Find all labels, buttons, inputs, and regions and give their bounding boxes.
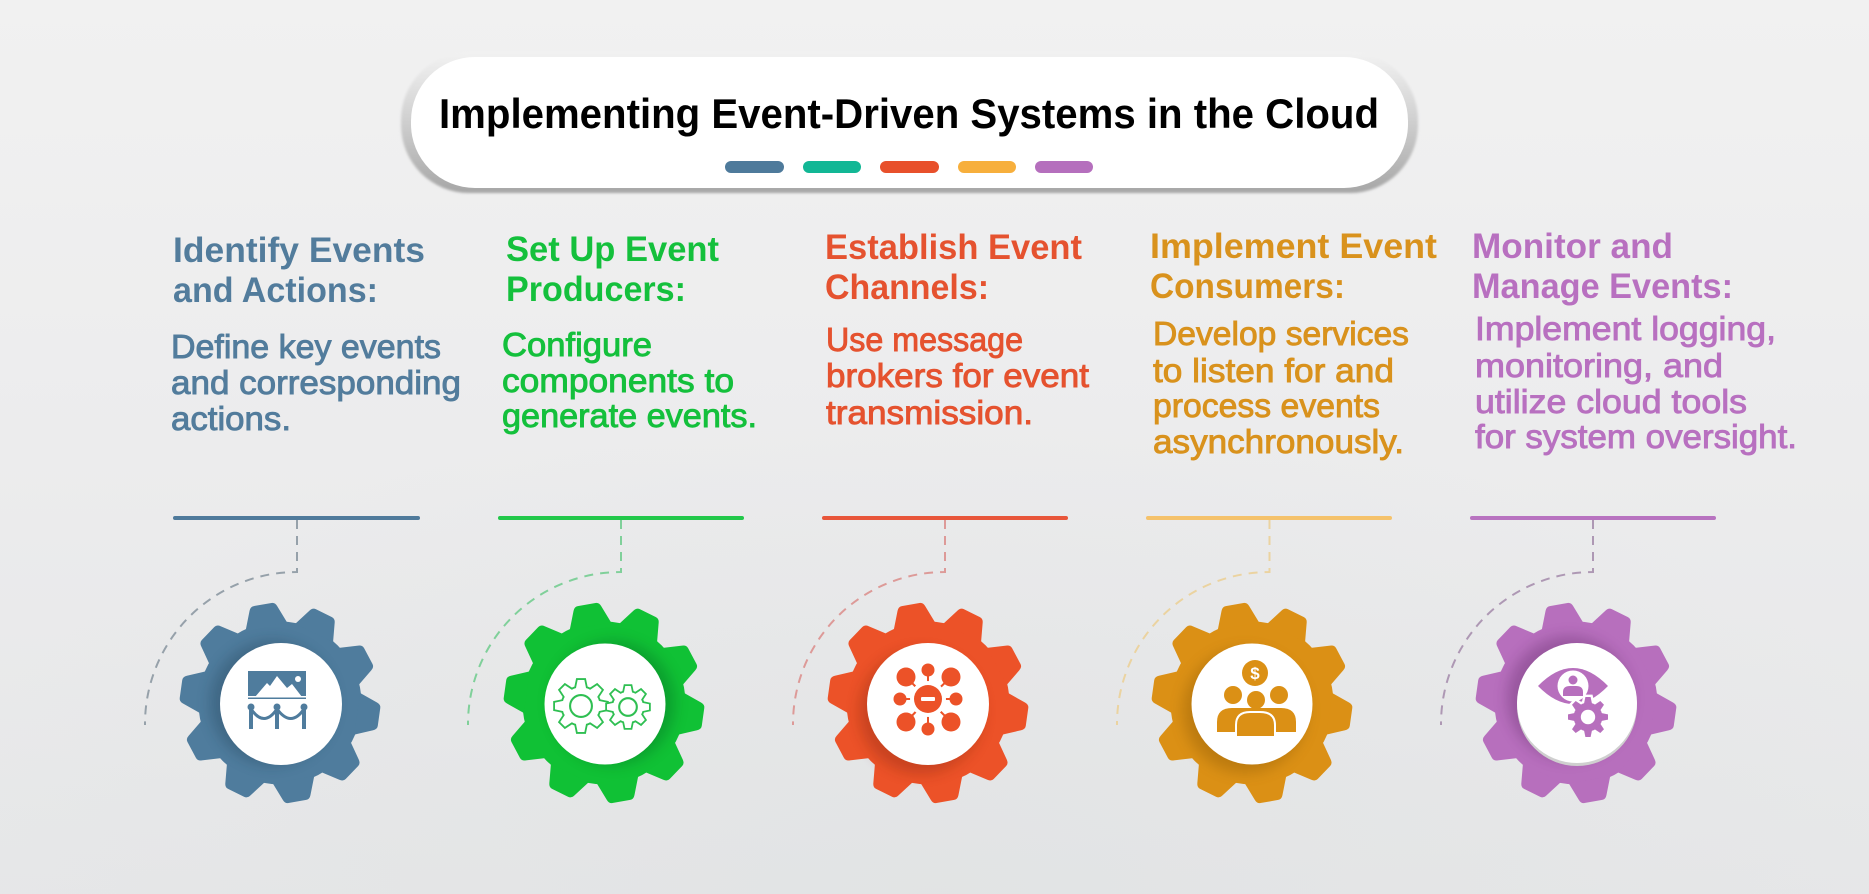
description: step 4 [1153,315,1409,460]
gear: step 2 [502,601,706,805]
description: step 5: monitoring, and [1475,347,1723,384]
description: step 3: transmission. [826,394,1033,431]
heading: monitor and manage events: Monitor and [1472,227,1673,266]
icon: two outlined gears [555,680,649,732]
description: step 1 [171,328,461,437]
panel: step 4 implement event consumers [1117,227,1437,805]
connector: step 3 [793,520,945,725]
description: step 1: Define key events [171,328,441,365]
description: step 2: components to [502,362,734,399]
connector: step 5 [1441,520,1593,725]
description: step 5 [1475,310,1797,455]
description: step 3: brokers for event [826,357,1089,394]
heading: establish event channels [825,228,1082,307]
heading: set up event producers [506,230,719,309]
panel: step 1 identify events and actions [145,231,461,805]
connector: step 2 [468,520,621,725]
description: step 5: utilize cloud tools [1475,383,1747,420]
gear: step 5 [1474,601,1678,805]
colour legend bars [725,161,1093,173]
description: step 2: generate events. [502,397,757,434]
title pill [401,52,1418,193]
heading: implement event consumers: Implement Event [1150,227,1437,266]
rule: step 2 [498,516,744,520]
description: step 4: to listen for and [1153,352,1394,389]
heading: implement event consumers [1150,227,1437,306]
rule: step 3 [822,516,1068,520]
title: Implementing Event-Driven Systems in the Cloud [439,90,1379,137]
panel: step 5 monitor and manage events [1441,227,1797,805]
heading: monitor and manage events [1472,227,1733,306]
description: step 5: Implement logging, [1475,310,1776,347]
panel: step 2 set up event producers [468,230,757,805]
icon: people group with dollar coin: $ [1250,664,1260,683]
gear: step 1 [178,601,382,805]
rule: step 1 [173,516,420,520]
heading: set up event producers: Set Up Event [506,230,719,269]
icon: gallery picture and rope barrier [248,671,308,729]
heading: establish event channels: Establish Event [825,228,1082,267]
gear: step 3 [826,601,1030,805]
description: step 5: for system oversight. [1475,418,1797,455]
heading: monitor and manage events: Manage Events: [1472,267,1733,306]
description: step 4: asynchronously. [1153,423,1404,460]
heading: identify events and actions [173,231,425,310]
connector: step 4 [1117,520,1270,725]
heading: establish event channels: Channels: [825,268,989,307]
description: step 1: actions. [171,400,291,437]
icon: hub with connected nodes [894,664,962,736]
rule: step 4 [1146,516,1392,520]
description: step 4: Develop services [1153,315,1409,352]
gear: step 4 [1150,601,1354,805]
panel: step 3 establish event channels [793,228,1089,805]
heading: implement event consumers: Consumers: [1150,267,1345,306]
description: step 3 [826,321,1089,431]
description: step 2 [502,326,757,434]
icon: eye with person and gear [1538,668,1608,737]
connector: step 1 [145,520,297,725]
description: step 1: and corresponding [171,364,461,401]
rule: step 5 [1470,516,1716,520]
heading: set up event producers: Producers: [506,270,686,309]
description: step 4: process events [1153,387,1380,424]
heading: identify events and actions: Identify Events [173,231,425,270]
description: step 3: Use message [826,321,1023,358]
icon: people group with dollar coin [1217,660,1296,737]
heading: identify events and actions: and Actions: [173,271,378,310]
description: step 2: Configure [502,326,652,363]
